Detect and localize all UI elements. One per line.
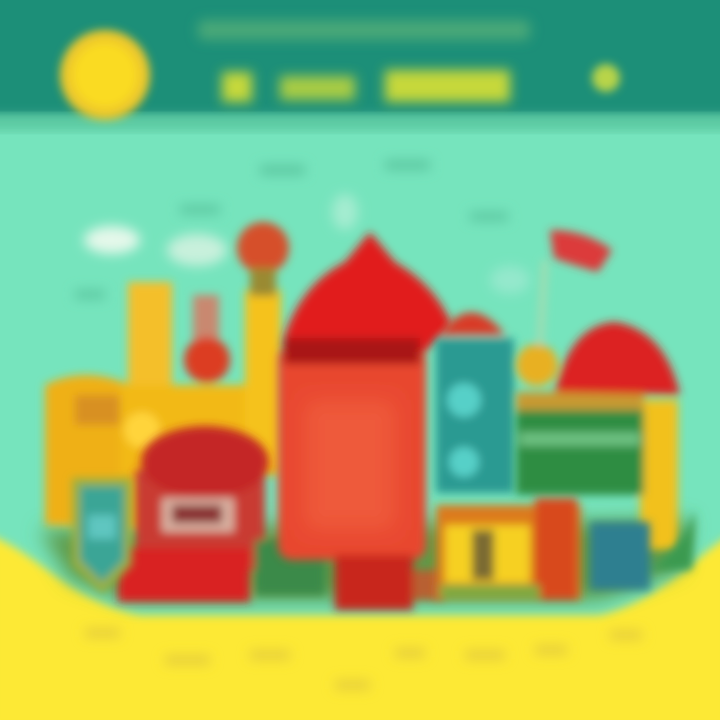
sky labels: illegible (75, 160, 508, 299)
heading: illegible title lines (198, 20, 530, 102)
buildings: left yellow group (45, 222, 289, 530)
foliage base behind buildings (40, 520, 690, 600)
building: right domed house (516, 260, 680, 550)
icon: red flag (550, 230, 612, 272)
building: orange storefront (436, 498, 581, 600)
icon: teal shield (72, 478, 132, 594)
panel: header band (0, 0, 720, 130)
ground labels: illegible (85, 628, 642, 690)
building: lower left red house (118, 426, 325, 602)
ground (0, 535, 720, 720)
icon: sun (60, 30, 150, 120)
icon: small header badge (592, 64, 620, 92)
building: small blue house (590, 510, 695, 590)
clouds (84, 194, 530, 294)
building: teal tower (436, 312, 514, 493)
building: central red tower (278, 232, 452, 610)
